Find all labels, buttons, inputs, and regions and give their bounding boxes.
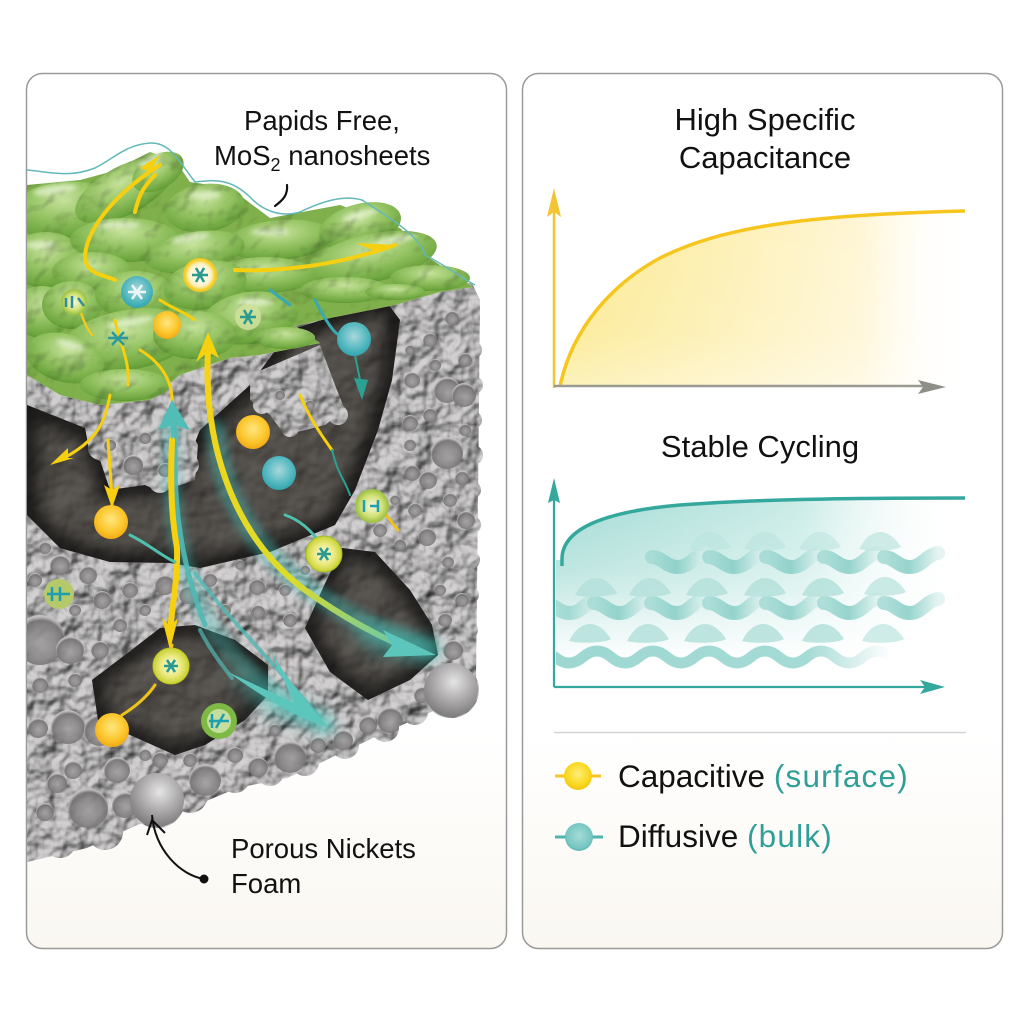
chart: capacitance curve [547,188,965,394]
legend: diffusive: Diffusive (bulk) [618,818,833,854]
label: MoS2 nanosheets: 2 [271,155,281,175]
ion: yellow sphere [153,311,181,339]
teal outline [27,143,475,285]
ion: ring yellow [183,258,217,292]
teal glow [171,420,325,725]
green highlights [26,150,417,352]
surface arrows [85,165,160,280]
label: MoS2 nanosheets: MoS [214,140,271,171]
ion: lime right [306,536,342,572]
ion: orange left [94,505,128,539]
ion: orange center [236,415,270,449]
ion: lime lower [153,648,189,684]
ion: green in foam [44,579,74,609]
legend: capacitive: Capacitive (surface) [618,758,909,794]
panel: charts and legend [522,74,1002,948]
porous nickel foam block [8,143,490,880]
chart: cycling curve [544,478,965,694]
yellow flow arrow down [170,440,177,632]
ion: teal surface [121,276,153,308]
ion: green center [235,304,261,330]
heading: high specific capacitance: High Specific [675,102,855,137]
dark cavity: central void [27,306,400,568]
arrowheads [50,155,436,727]
yellow-to-teal flow arrow [208,350,400,645]
foam chunk: middle [250,345,348,437]
ion: teal center [262,456,296,490]
flow arrows [60,165,440,735]
label: MoS2 nanosheets: nanosheets [281,140,430,171]
dark cavity: right void [305,548,438,700]
dark cavity: lower void [92,625,268,755]
green MoS2 nanosheet layer [8,143,473,405]
foam pores [15,311,476,828]
divider [554,732,966,734]
label: Foam: Foam [231,868,301,899]
teal flow arrow [175,430,205,625]
panel: porous foam illustration [8,74,507,948]
ion: orange lower [95,713,129,747]
leader: foam arrow [147,815,208,882]
ion: small teal mark [108,332,128,345]
ion: green left [61,289,87,315]
particles [44,258,389,747]
ion: teal top right [337,322,371,356]
foam chunk: left [85,428,199,493]
heading: high specific capacitance [675,102,855,175]
heading: high specific capacitance: Capacitance [679,140,851,175]
label: Papids Free: Papids Free, [244,105,400,136]
foam balls [130,663,478,827]
ion: green lower [201,703,237,739]
label: Porous Nickets: Porous Nickets [231,833,416,864]
ion: green right [355,489,389,523]
heading: stable cycling: Stable Cycling [661,429,859,464]
leader: nanosheets [275,185,287,206]
wave rows [544,532,938,663]
